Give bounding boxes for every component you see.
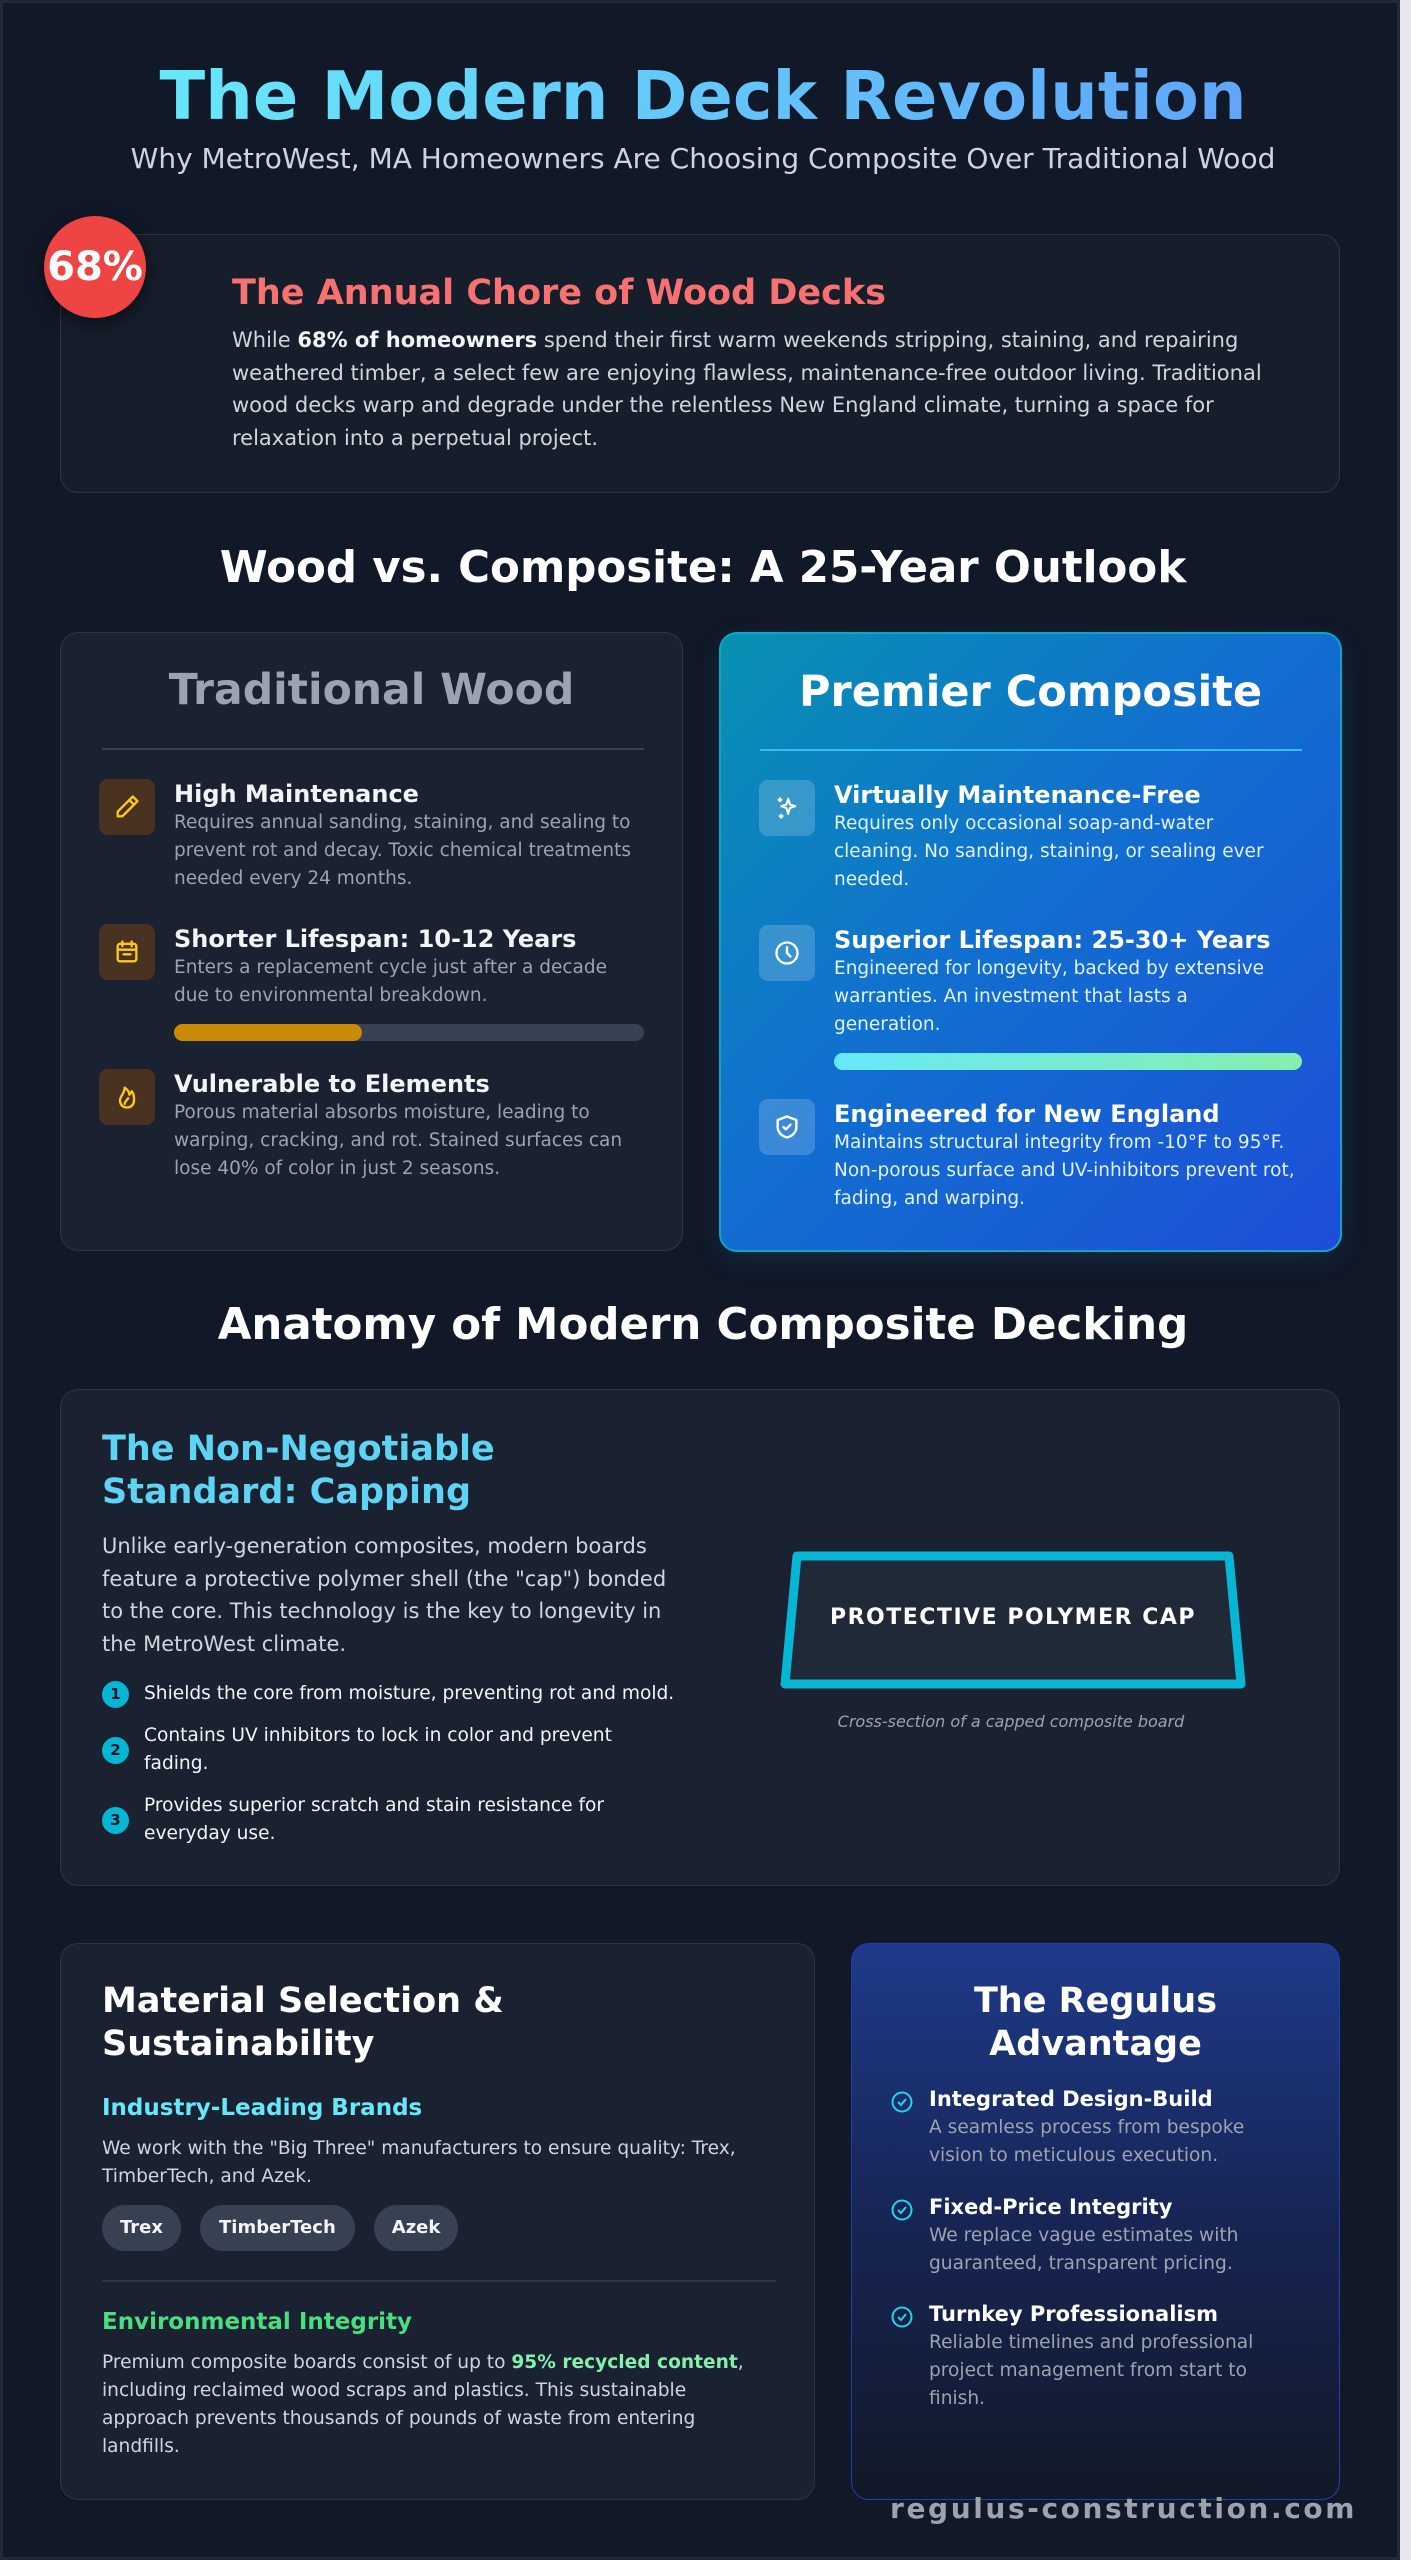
heading: wood vs composite: Wood vs. Composite: A 25-Year Outlook <box>220 543 1186 593</box>
list: capping benefits: Shields the core from moisture, preventing rot and mold. <box>144 1683 674 1704</box>
item: shorter lifespan: Enters a replacement cycle just after a decade due to environmental breakdown. <box>174 957 607 1006</box>
panel: annual chore <box>60 234 1340 493</box>
text: annual chore body: While 68% of homeowners spend their first warm weekends stripping, staining, and repairing weathered timber, a select few are enjoying flawless, maintenance-free outdoor living. Traditional wood decks warp and degrade under the relentless New England climate, turning a space for relaxation into a perpetual project. <box>232 328 1262 450</box>
icon: flame <box>99 1069 155 1125</box>
item: vulnerable: Vulnerable to Elements <box>174 1070 490 1098</box>
item: new england: Engineered for New England <box>834 1100 1220 1128</box>
text: brands: We work with the "Big Three" manufacturers to ensure quality: Trex, TimberTech, and Azek. <box>102 2138 736 2187</box>
list: capping benefits: 3 <box>110 1810 121 1828</box>
text: environmental <box>102 2352 744 2457</box>
badge: 68%: 68% <box>47 244 143 290</box>
item: new england: Maintains structural integrity from -10°F to 95°F. Non-porous surface and UV-inhibitors prevent rot, fading, and warping. <box>834 1132 1295 1209</box>
pills: brands: TimberTech <box>219 2217 336 2238</box>
subheading: brands: Industry-Leading Brands <box>102 2095 422 2121</box>
text: environmental: approach prevents thousands of pounds of waste from entering <box>102 2408 695 2429</box>
heading: material selection: Material Selection & Sustainability <box>102 1981 504 2064</box>
title: The Modern Deck Revolution <box>159 57 1247 135</box>
bar: composite lifespan <box>834 1053 1302 1070</box>
icon: calendar <box>99 924 155 980</box>
badge: 68% <box>44 216 146 318</box>
icon: shield <box>759 1099 815 1155</box>
panel: premier composite <box>719 632 1342 1252</box>
item: turnkey <box>892 2302 1253 2409</box>
panel: capping <box>60 1389 1340 1886</box>
list: capping benefits <box>102 1681 674 1844</box>
item: shorter lifespan <box>99 924 644 1041</box>
item: design-build: Integrated Design-Build <box>929 2087 1213 2111</box>
list: capping benefits: Provides superior scratch and stain resistance for everyday use. <box>144 1795 604 1844</box>
diagram: board cross-section: PROTECTIVE POLYMER CAP <box>830 1605 1196 1630</box>
item: maintenance-free <box>759 780 1264 890</box>
subtitle: Why MetroWest, MA Homeowners Are Choosing Composite Over Traditional Wood <box>131 142 1275 175</box>
text: capping body: Unlike early-generation composites, modern boards feature a protective polymer shell (the "cap") bonded to the core. This technology is the key to longevity in the MetroWest climate. <box>102 1534 666 1656</box>
bar: wood lifespan <box>174 1024 644 1041</box>
icon: sparkles <box>759 780 815 836</box>
subheading: environmental: Environmental Integrity <box>102 2309 412 2335</box>
item: shorter lifespan: Shorter Lifespan: 10-12 Years <box>174 925 576 953</box>
pills: brands: Azek <box>392 2217 440 2238</box>
pills: brands <box>102 2205 458 2251</box>
item: superior lifespan: generation. <box>834 1014 940 1035</box>
caption: Cross-section of a capped composite board <box>838 1712 1184 1731</box>
item: fixed-price: Fixed-Price Integrity <box>929 2195 1172 2219</box>
text: environmental: Premium composite boards consist of up to 95% recycled content, <box>102 2352 744 2373</box>
item: high maintenance: Requires annual sanding, staining, and sealing to prevent rot and decay. Toxic chemical treatments needed every 24 months. <box>174 812 631 889</box>
item: turnkey: Reliable timelines and professional project management from start to finish. <box>929 2332 1253 2409</box>
item: high maintenance <box>99 779 631 889</box>
list: capping benefits: 1 <box>110 1684 121 1702</box>
heading: regulus advantage: The Regulus <box>974 1981 1217 2021</box>
item: fixed-price <box>892 2195 1238 2274</box>
footer: website: regulus-construction.com <box>890 2492 1357 2525</box>
item: superior lifespan: warranties. An investment that lasts a <box>834 986 1188 1007</box>
item: superior lifespan: Superior Lifespan: 25-30+ Years <box>834 926 1270 954</box>
panel: material selection <box>60 1943 815 2500</box>
panel: traditional wood <box>60 632 683 1251</box>
list: capping benefits: 2 <box>110 1740 121 1758</box>
item: superior lifespan: Engineered for longevity, backed by extensive <box>834 958 1264 979</box>
icon: clock <box>759 925 815 981</box>
text: environmental: including reclaimed wood scraps and plastics. This sustainable <box>102 2380 686 2401</box>
heading: traditional wood: Traditional Wood <box>169 666 574 715</box>
diagram: board cross-section <box>780 1552 1246 1688</box>
icon: pencil <box>99 779 155 835</box>
pills: brands: Trex <box>120 2217 163 2238</box>
heading: regulus advantage <box>974 1981 1217 2064</box>
item: fixed-price: We replace vague estimates with guaranteed, transparent pricing. <box>929 2225 1238 2274</box>
heading: premier composite: Premier Composite <box>799 667 1262 717</box>
item: superior lifespan <box>759 925 1302 1070</box>
item: turnkey: Turnkey Professionalism <box>929 2302 1218 2326</box>
item: vulnerable: Porous material absorbs moisture, leading to warping, cracking, and rot. Stained surfaces can lose 40% of color in just 2 seasons. <box>174 1102 622 1179</box>
heading: regulus advantage: Advantage <box>989 2024 1202 2064</box>
list: capping benefits: Contains UV inhibitors to lock in color and prevent fading. <box>144 1725 612 1774</box>
text: environmental: landfills. <box>102 2436 180 2457</box>
item: design-build: A seamless process from bespoke vision to meticulous execution. <box>929 2117 1244 2166</box>
heading: annual chore: The Annual Chore of Wood Decks <box>232 273 886 313</box>
heading: capping: The Non-Negotiable Standard: Capping <box>102 1429 495 1512</box>
item: maintenance-free: Requires only occasional soap-and-water cleaning. No sanding, staining, or sealing ever needed. <box>834 813 1264 890</box>
item: new england <box>759 1099 1295 1209</box>
panel: regulus advantage <box>851 1943 1340 2500</box>
item: vulnerable <box>99 1069 622 1179</box>
item: high maintenance: High Maintenance <box>174 780 419 808</box>
heading: anatomy: Anatomy of Modern Composite Decking <box>218 1300 1188 1350</box>
item: maintenance-free: Virtually Maintenance-Free <box>834 781 1201 809</box>
item: design-build <box>892 2087 1244 2166</box>
